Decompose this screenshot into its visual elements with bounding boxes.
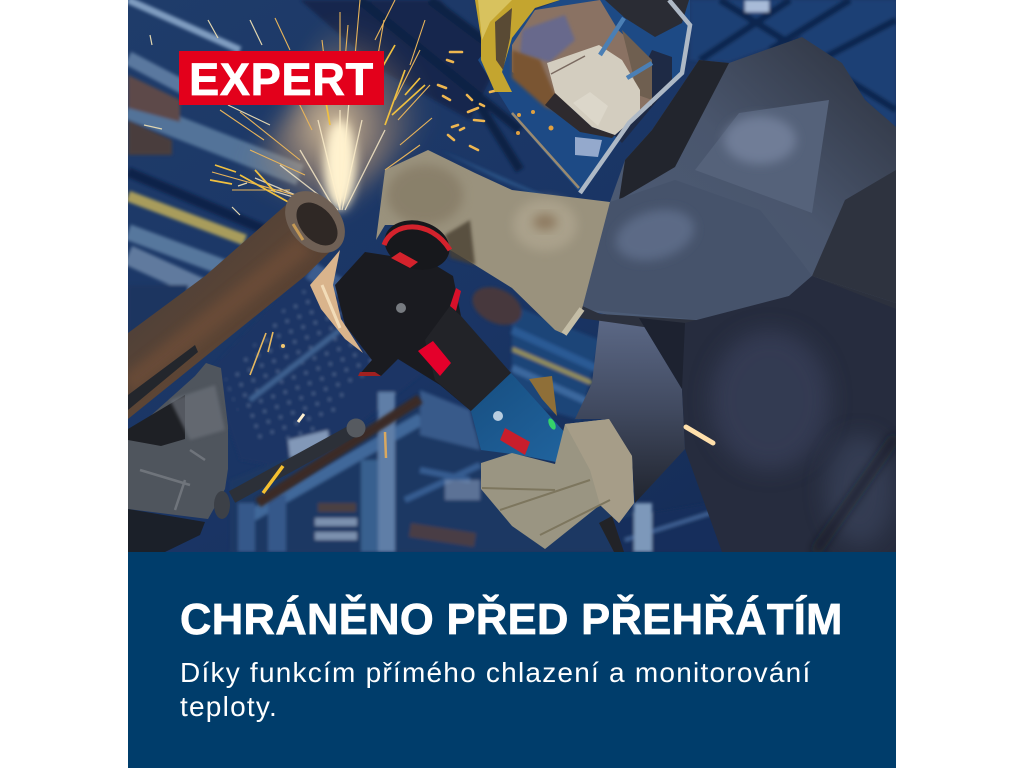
- sleeve hem: [569, 276, 896, 335]
- leather apron: [639, 276, 896, 552]
- sparks: [144, 0, 498, 215]
- blue housing: [471, 373, 595, 472]
- lower truss: [230, 400, 720, 552]
- heading: CHRÁNĚNO PŘED PŘEHŘÁTÍM: [180, 596, 843, 644]
- face shield and helmet: [475, 0, 690, 193]
- photo: worker grinding a steel pipe: [128, 0, 896, 552]
- central column: [378, 392, 395, 552]
- thumb leather: [529, 376, 557, 416]
- power cable: [599, 516, 624, 552]
- torso shoulder: [580, 37, 896, 330]
- small flying sparks: [250, 332, 386, 458]
- right lower bars: [512, 305, 600, 420]
- pocket highlight: [695, 100, 829, 213]
- glowing spark on apron: [686, 427, 713, 443]
- collar: [619, 60, 729, 200]
- grinder motor body: [425, 306, 511, 411]
- welding-bar: [232, 399, 420, 503]
- badge: EXPERT: EXPERT: [189, 54, 374, 105]
- bench vise: [128, 345, 230, 552]
- red switch: [418, 341, 451, 376]
- subtext: Díky funkcím přímého chlazení a monitorování teploty.: [180, 657, 811, 722]
- panel: product card: [128, 0, 896, 768]
- cutting disc: [310, 250, 363, 353]
- steel pipe: [128, 179, 357, 419]
- forearm: [569, 180, 812, 321]
- gear head: [335, 252, 471, 411]
- status LED: [547, 417, 557, 431]
- panel: caption band: [128, 552, 896, 768]
- lower welding glove: [481, 419, 634, 549]
- background steel structure: [128, 0, 896, 552]
- worker jacket: [569, 37, 896, 552]
- top right girders: [690, 0, 896, 130]
- helmet: [475, 0, 560, 92]
- shield rim: [580, 0, 690, 193]
- angle grinder: [310, 213, 624, 552]
- mid deck: [210, 276, 440, 470]
- upper welding glove: [376, 150, 610, 334]
- lower sleeve: [575, 314, 685, 503]
- knob: [379, 213, 455, 277]
